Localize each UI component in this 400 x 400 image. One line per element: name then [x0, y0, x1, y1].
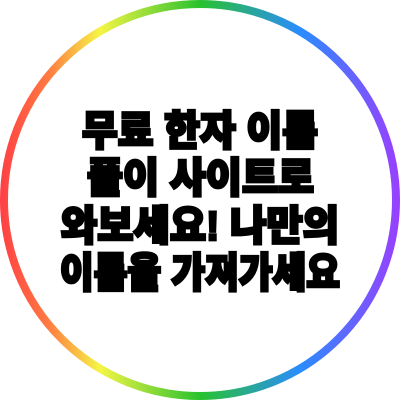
title — [60, 108, 340, 296]
title line 1: 무료 한자 이름 — [82, 108, 318, 154]
title line 4: 이름을 가져가세요 — [60, 250, 340, 296]
title line 3: 와보세요! 나만의 — [61, 203, 339, 249]
title line 2: 풀이 사이트로 — [87, 155, 314, 201]
